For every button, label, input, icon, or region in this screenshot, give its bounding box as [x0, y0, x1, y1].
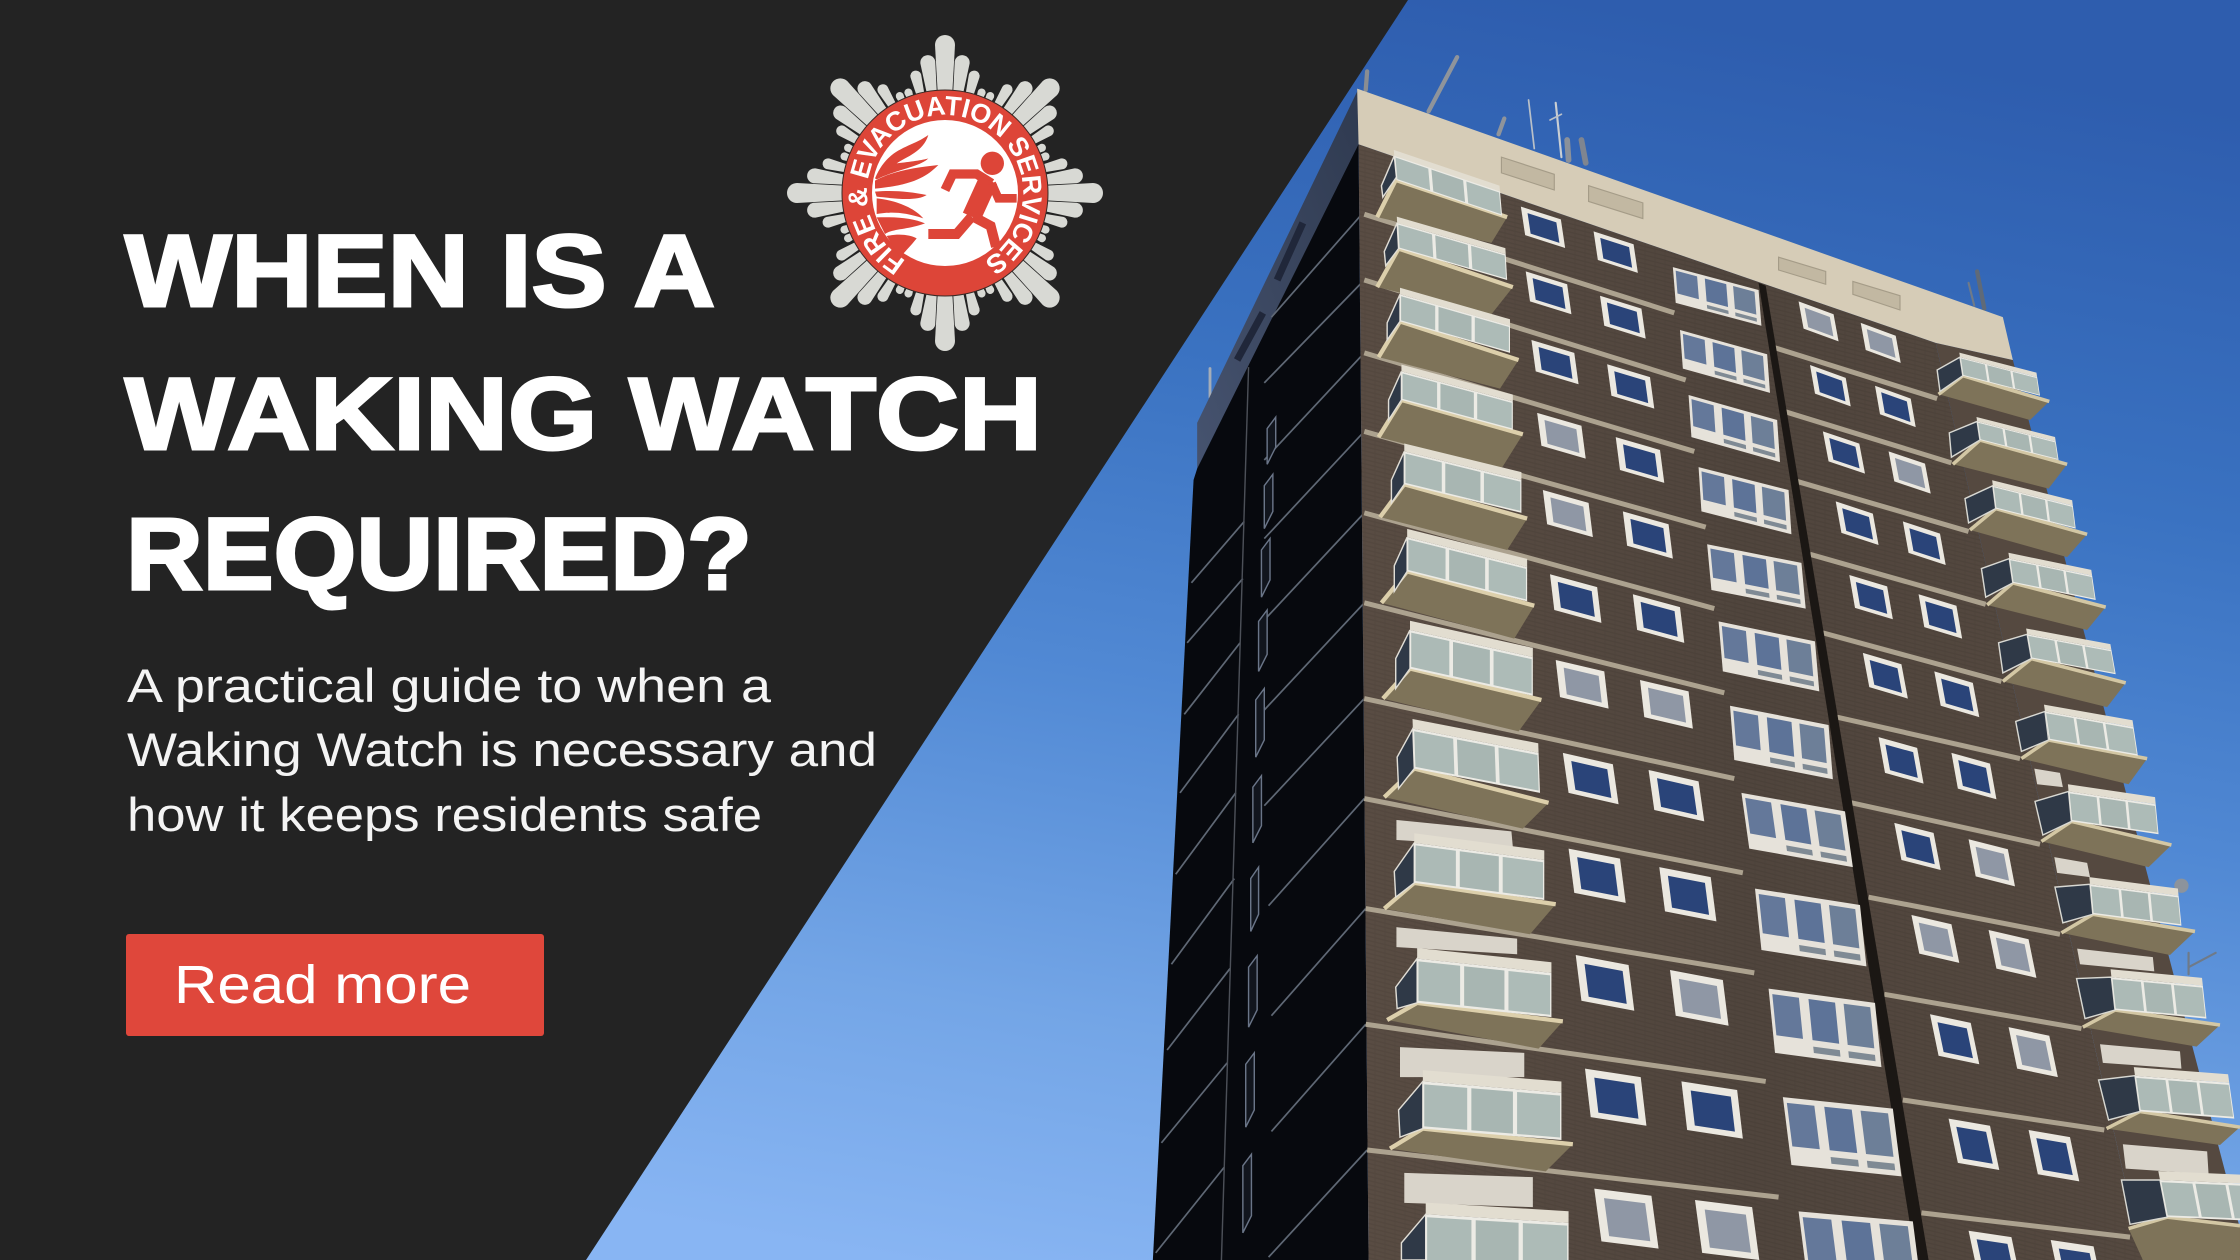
windows, right block	[1799, 301, 2104, 1260]
balcony slabs	[1939, 376, 2240, 1260]
subtitle: Waking Watch is necessary and	[127, 723, 877, 776]
horizontal string courses, right block	[1773, 347, 2130, 1237]
title	[125, 214, 1042, 611]
roof antennas	[1210, 57, 2216, 974]
balcony glass panels	[1959, 353, 2240, 1221]
balcony slab edges	[1377, 180, 1573, 1149]
dark vertical recess	[1759, 283, 1929, 1260]
read more button	[126, 934, 544, 1036]
subtitle	[127, 659, 877, 841]
badge lettering: FIRE & EVACUATION SERVICES	[848, 96, 1042, 275]
horizontal string courses, left block	[1364, 214, 1779, 1197]
white centre	[872, 120, 1018, 266]
balconies, left column	[1377, 150, 1573, 1260]
flames	[875, 135, 938, 257]
balcony side panels	[1937, 357, 2167, 1224]
balcony glass panels	[1394, 150, 1569, 1260]
badge rays	[787, 35, 1103, 351]
dark shaded side wall	[1153, 144, 1369, 1260]
balcony slabs	[1377, 180, 1573, 1171]
title: REQUIRED?	[126, 497, 752, 611]
side wall floor lines	[1156, 211, 1367, 1260]
running figure	[928, 152, 1017, 247]
brick front face	[1359, 144, 2143, 1260]
door frames behind right balconies	[2034, 769, 2209, 1174]
read more button: Read more	[174, 955, 471, 1015]
side wall small windows	[1243, 417, 1276, 1233]
balcony slab edges	[1939, 376, 2240, 1229]
windows, left block	[1521, 207, 1759, 1260]
title: WHEN IS A	[125, 214, 715, 328]
logo: fire and evacuation services badge	[787, 35, 1103, 351]
frames behind lower balconies	[1396, 820, 1533, 1207]
subtitle: how it keeps residents safe	[127, 788, 762, 841]
subtitle: A practical guide to when a	[127, 659, 772, 712]
parapet side	[1197, 89, 1359, 469]
brick coursing texture	[1359, 144, 2143, 1260]
roof vents	[1501, 157, 1900, 310]
concrete roof band	[1357, 89, 2013, 360]
parapet slits	[1237, 223, 1303, 360]
title: WAKING WATCH	[125, 357, 1042, 471]
tower block photo	[1153, 57, 2240, 1260]
red ring	[842, 90, 1048, 296]
dark diagonal panel	[0, 0, 1408, 1260]
balconies, right column	[1937, 353, 2240, 1260]
balcony side panels	[1381, 156, 1426, 1260]
recessed back wall behind right balconies	[1936, 343, 2240, 1260]
triple windows, centre block	[1673, 267, 1921, 1260]
